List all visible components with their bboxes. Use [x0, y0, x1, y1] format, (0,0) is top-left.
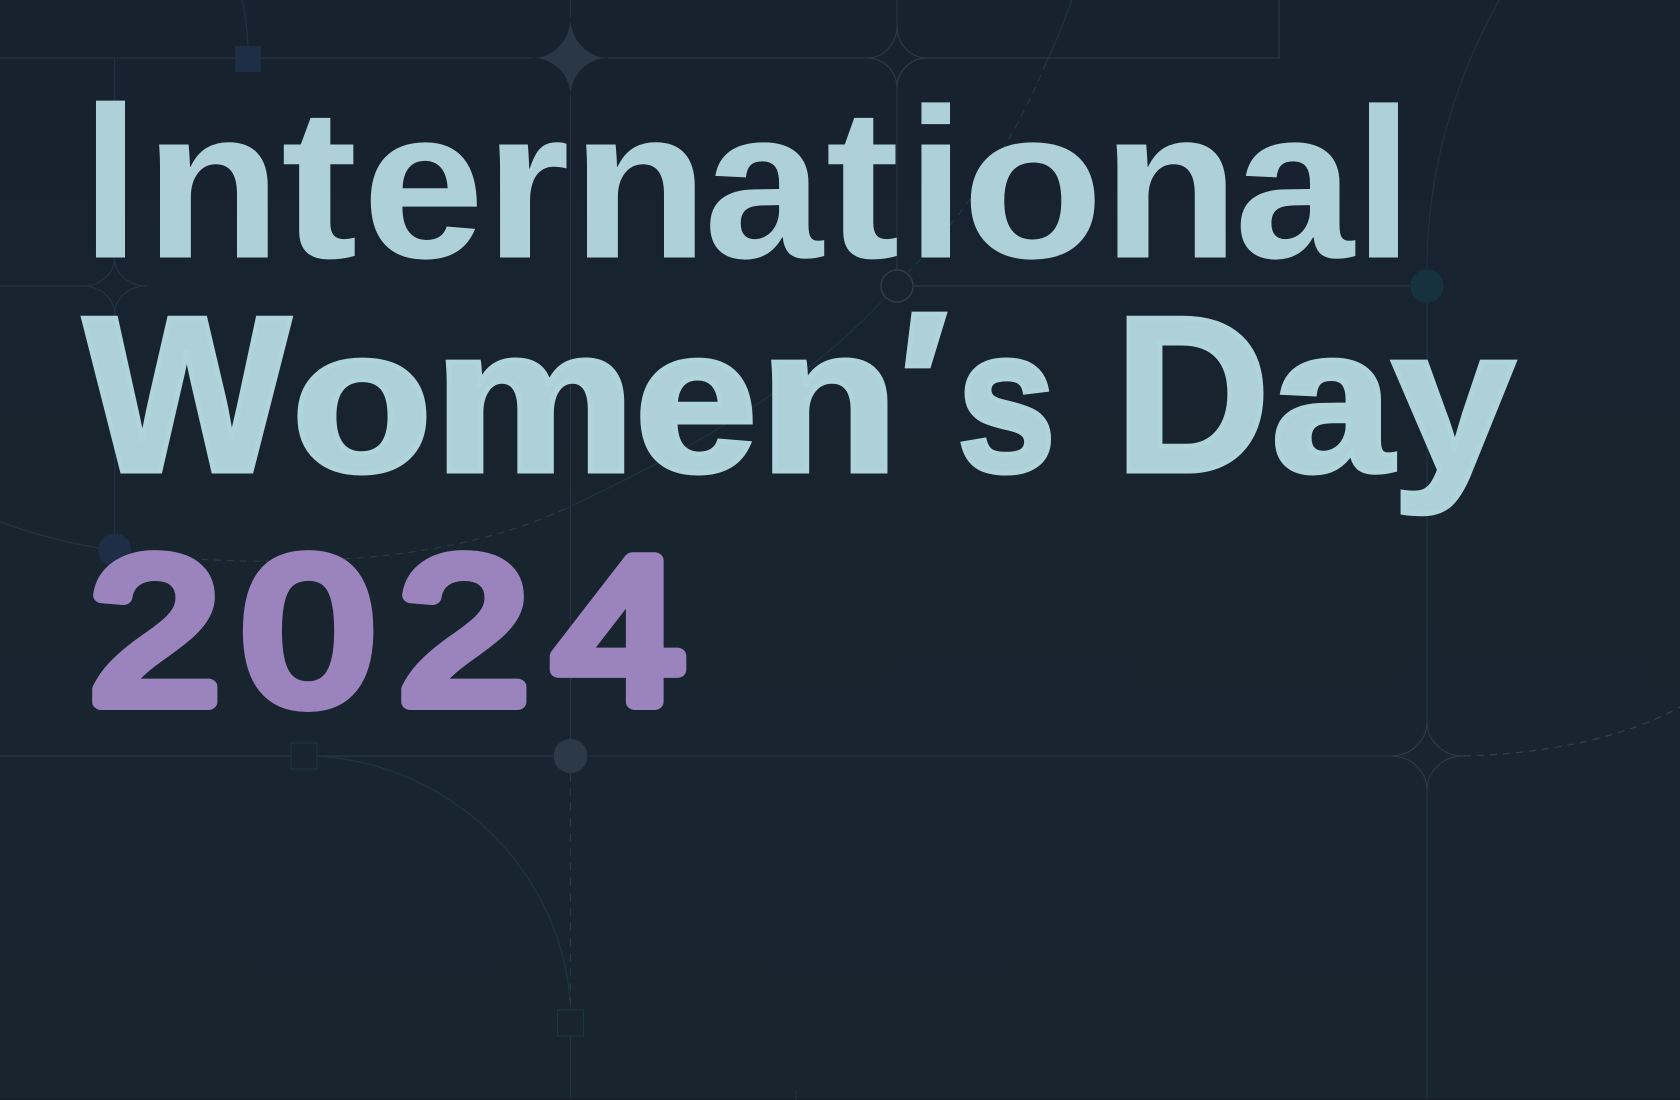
title line: International: t — [281, 64, 358, 304]
title line: Women's Day: ′ — [899, 270, 948, 498]
title line: International: n — [571, 64, 709, 304]
title line: International: a — [704, 64, 825, 304]
icon: filled square node top left — [235, 46, 261, 72]
title line: International: n — [1102, 64, 1240, 304]
title line: International: l — [1354, 64, 1413, 304]
title line: Women's Day: m — [434, 285, 636, 515]
title line: Women's Day: y — [1392, 285, 1515, 515]
title line: International: t — [826, 64, 900, 304]
icon: teal circle node — [1410, 269, 1444, 303]
icon: outlined square node at arc end — [558, 1010, 584, 1036]
title line: Women's Day: s — [957, 285, 1056, 515]
title line: Women's Day: W — [83, 271, 291, 519]
icon: outlined star node lower right — [1392, 722, 1464, 790]
title line: International: I — [82, 52, 138, 306]
title line: International: o — [962, 64, 1104, 304]
title line: Women's Day: D — [1115, 271, 1270, 519]
title line: International: a — [1234, 64, 1356, 304]
title line: Women's Day: n — [759, 285, 899, 515]
title line: Women's Day: e — [634, 285, 758, 515]
title line: International: r — [485, 64, 570, 304]
icon: outlined circle node — [881, 270, 913, 302]
icon: outlined star node left — [83, 258, 147, 314]
title — [82, 52, 1515, 746]
title line: International: e — [362, 64, 484, 304]
icon: navy circle node — [98, 534, 131, 566]
title line: 2024: 2024 — [89, 515, 684, 746]
title line: International: n — [144, 64, 282, 304]
title line: Women's Day: o — [291, 285, 433, 515]
icon: filled star node top centre — [533, 18, 608, 95]
title line: Women's Day: a — [1271, 285, 1395, 515]
icon: grey circle node — [554, 739, 588, 773]
icon: outlined square node on middle line — [291, 743, 317, 769]
icon: outlined star node top — [867, 26, 927, 88]
title line: International: i — [907, 64, 965, 304]
